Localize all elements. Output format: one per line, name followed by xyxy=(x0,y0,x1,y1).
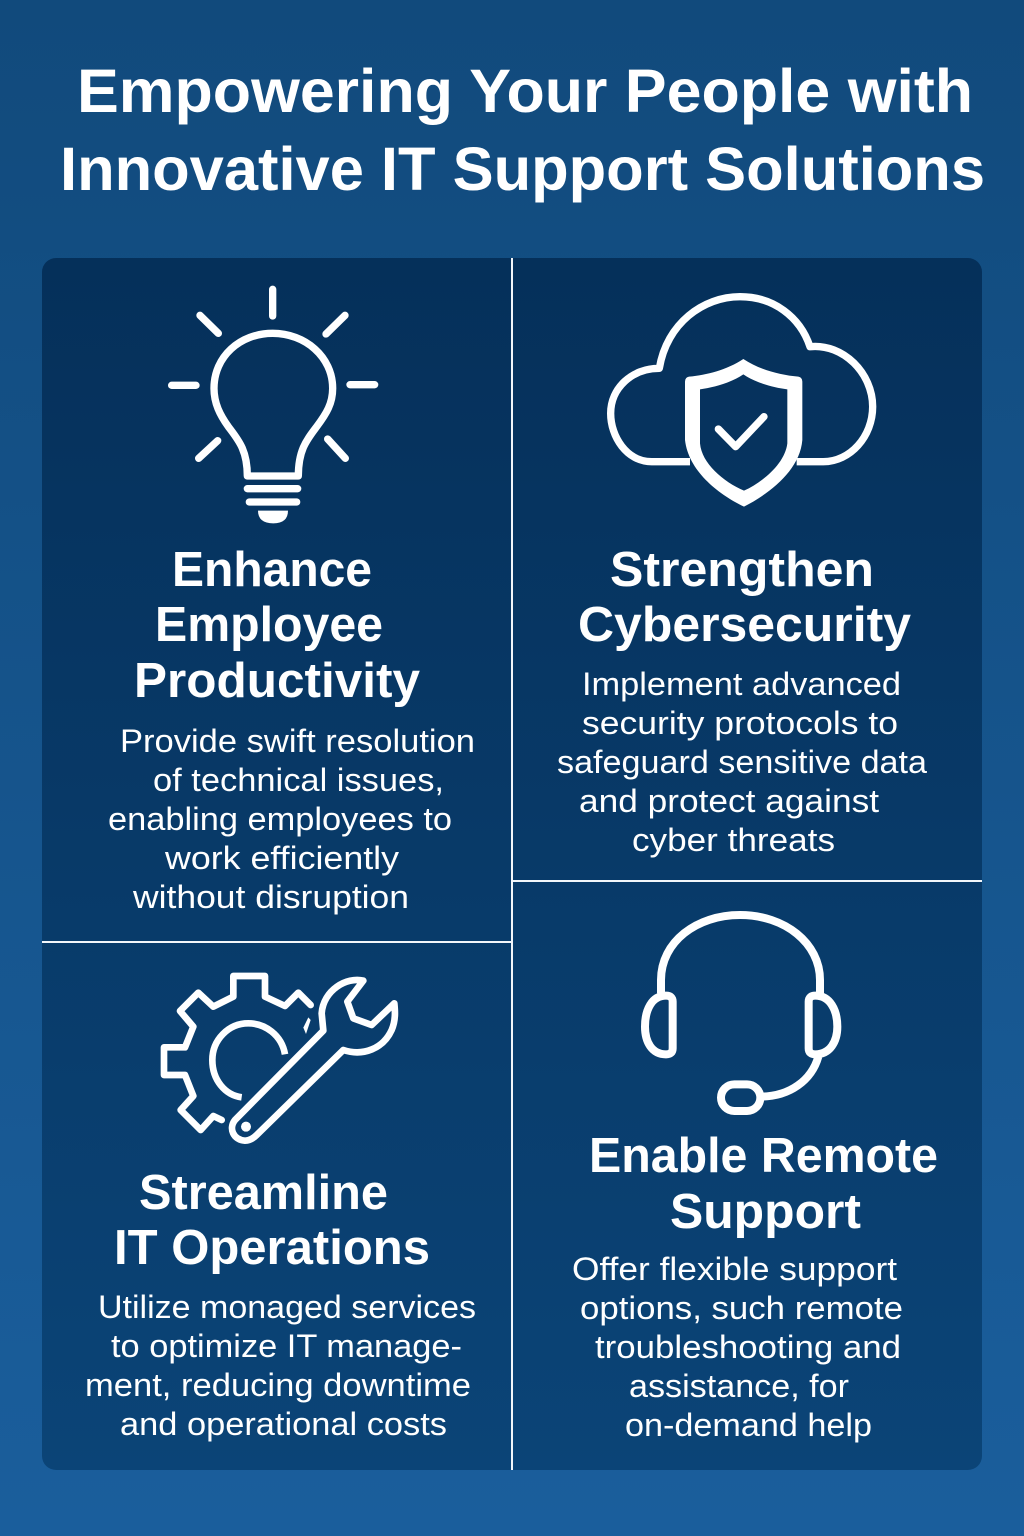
panel: enable remote support xyxy=(572,915,938,1443)
text block: cybersecurity description: and protect against xyxy=(579,783,879,819)
text block: operations description: ment, reducing downtime xyxy=(85,1367,471,1403)
text block: cybersecurity description: safeguard sensitive data xyxy=(557,744,927,780)
text block: remote support description: troubleshooting and xyxy=(595,1329,901,1365)
panel background xyxy=(42,258,982,1470)
heading: streamline it operations xyxy=(114,1166,430,1275)
text block: remote support description: Offer flexible support xyxy=(572,1251,897,1287)
panel: streamline it operations xyxy=(85,976,476,1442)
heading: enhance employee productivity: Enhance xyxy=(172,543,372,597)
icon: headset xyxy=(645,915,837,1111)
text block: productivity description: of technical issues, xyxy=(153,762,444,798)
title: Innovative IT Support Solutions xyxy=(60,135,985,203)
text block: remote support description: assistance, for xyxy=(629,1368,849,1404)
text block: operations description: and operational costs xyxy=(120,1406,447,1442)
heading: enable remote support xyxy=(589,1129,938,1239)
text block: productivity description: work efficiently xyxy=(164,840,399,876)
text block: remote support description: on-demand help xyxy=(625,1407,872,1443)
heading: streamline it operations: IT Operations xyxy=(114,1221,430,1275)
text block: productivity description: without disruption xyxy=(132,879,409,915)
title xyxy=(60,57,985,203)
heading: strengthen cybersecurity xyxy=(578,543,911,652)
text block: productivity description: enabling employees to xyxy=(108,801,452,837)
heading: enable remote support: Enable Remote xyxy=(589,1129,938,1183)
panel: strengthen cybersecurity xyxy=(557,297,927,858)
text block: cybersecurity description xyxy=(557,666,927,858)
text block: cybersecurity description: security protocols to xyxy=(582,705,898,741)
heading: enhance employee productivity: Productivity xyxy=(134,654,420,708)
heading: enhance employee productivity xyxy=(134,543,420,708)
heading: streamline it operations: Streamline xyxy=(139,1166,388,1220)
icon: gear and wrench xyxy=(164,976,395,1141)
heading: strengthen cybersecurity: Cybersecurity xyxy=(578,598,911,652)
text block: cybersecurity description: Implement advanced xyxy=(582,666,901,702)
text block: operations description xyxy=(85,1289,476,1442)
text block: remote support description xyxy=(572,1251,903,1443)
text block: operations description: Utilize monaged services xyxy=(98,1289,476,1325)
heading: enable remote support: Support xyxy=(670,1185,861,1239)
text block: remote support description: options, such remote xyxy=(580,1290,903,1326)
panel: enhance employee productivity xyxy=(108,289,475,915)
icon: light bulb xyxy=(172,289,375,523)
title: Empowering Your People with xyxy=(77,57,973,125)
text block: productivity description xyxy=(108,723,475,915)
text block: operations description: to optimize IT manage- xyxy=(111,1328,462,1364)
heading: strengthen cybersecurity: Strengthen xyxy=(610,543,874,597)
text block: productivity description: Provide swift resolution xyxy=(120,723,475,759)
icon: cloud with shield xyxy=(611,297,873,507)
heading: enhance employee productivity: Employee xyxy=(155,598,383,652)
text block: cybersecurity description: cyber threats xyxy=(632,822,835,858)
